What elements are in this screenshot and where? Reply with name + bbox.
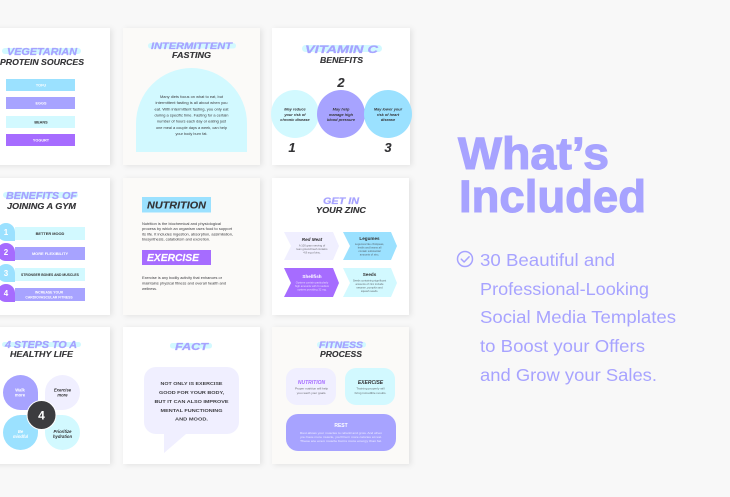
arch shape with text: intermittent fasting is all about when you bbox=[156, 101, 228, 105]
text block: description: Social Media Templates bbox=[480, 307, 676, 327]
circle: blood pressure: May help bbox=[333, 106, 350, 112]
arch shape with text: one meal a couple days a week, can help bbox=[156, 126, 227, 130]
heading: benefits of joining a gym bbox=[3, 191, 78, 211]
list: protein bars: BEANS bbox=[34, 120, 48, 124]
text block: description bbox=[480, 250, 676, 385]
chevron: seeds: Seeds bbox=[363, 272, 377, 277]
petal: walk more: more bbox=[15, 392, 26, 398]
heading: get in your zinc bbox=[316, 196, 366, 215]
text block: description: Professional-Looking bbox=[480, 279, 649, 299]
box: nutrition: Proper nutrition will help bbox=[295, 386, 328, 390]
panel: vitamin c benefits bbox=[271, 28, 412, 165]
numbers 1 2 3: 3 bbox=[384, 140, 392, 155]
heading: vitamin c benefits: BENEFITS bbox=[320, 56, 364, 65]
title: What's Included: What’s bbox=[458, 128, 609, 179]
row 1: better mood bbox=[0, 223, 85, 241]
text block: description: to Boost your Offers bbox=[480, 336, 645, 356]
box: rest bbox=[286, 414, 396, 451]
numbers 1 2 3: 2 bbox=[336, 75, 345, 90]
heading: vegetarian protein sources: VEGETARIAN bbox=[7, 47, 78, 58]
circle: heart disease: disease bbox=[381, 117, 396, 122]
heading: nutrition: NUTRITION bbox=[147, 201, 207, 212]
heading: benefits of joining a gym: JOINING A GYM bbox=[7, 202, 76, 211]
circle: reduce chronic disease: May reduce bbox=[284, 106, 307, 112]
chevron: shellfish: oysters providing 32 mg. bbox=[297, 288, 327, 292]
heading: get in your zinc: YOUR ZINC bbox=[316, 206, 366, 215]
panel: fitness process bbox=[272, 327, 409, 464]
petal: be mindful: Be bbox=[18, 429, 24, 434]
chevron: legumes: lentils and beans all bbox=[358, 246, 382, 250]
petal: walk more: Walk bbox=[15, 388, 25, 392]
speech bubble with fact text: GOOD FOR YOUR BODY, bbox=[159, 390, 225, 396]
row 3: stronger bones bbox=[0, 264, 85, 282]
box: exercise: bring incredible results. bbox=[355, 391, 387, 395]
row 4: cardiovascular fitness: CARDIOVASCULAR FITNESS bbox=[25, 296, 73, 300]
text: exercise definition bbox=[142, 276, 226, 291]
arch shape with text: your body burn fat. bbox=[176, 132, 208, 136]
chevron: seeds: squash seeds. bbox=[361, 289, 378, 293]
heading: vitamin c benefits: VITAMIN C bbox=[305, 44, 379, 56]
heading: intermittent fasting: FASTING bbox=[172, 51, 211, 60]
center circle: 4: 4 bbox=[38, 408, 45, 422]
text: nutrition definition: biosynthesis, catabolism and excretion. bbox=[142, 238, 210, 242]
title: What's Included bbox=[458, 128, 646, 222]
list: protein bars: EGGS bbox=[36, 102, 47, 106]
heading: fitness process bbox=[317, 340, 366, 359]
heading: get in your zinc: GET IN bbox=[323, 196, 360, 207]
row 1: better mood: 1 bbox=[4, 228, 9, 237]
chevron: legumes: Legumes bbox=[359, 236, 380, 241]
speech bubble with fact text: AND MOOD. bbox=[175, 417, 208, 423]
arch shape with text: number of hours each day or eating just bbox=[157, 120, 226, 124]
chevron: legumes bbox=[343, 232, 397, 260]
row 4: cardiovascular fitness bbox=[0, 284, 85, 302]
petal: walk more bbox=[3, 375, 38, 410]
list: protein bars bbox=[6, 79, 75, 146]
heading: exercise: EXERCISE bbox=[147, 253, 199, 264]
circle: reduce chronic disease bbox=[271, 90, 319, 138]
petal: prioritize hydration bbox=[45, 415, 80, 450]
box: rest: you have more muscle, you'll burn more calories at rest. bbox=[300, 435, 382, 439]
heading: intermittent fasting: INTERMITTENT bbox=[151, 41, 233, 52]
heading: intermittent fasting bbox=[148, 41, 236, 60]
speech bubble with fact text: NOT ONLY IS EXERCISE bbox=[160, 381, 223, 387]
petal: prioritize hydration: hydration bbox=[53, 434, 72, 439]
chevron: shellfish: Oysters contain particularly bbox=[296, 280, 329, 284]
panel: vegetarian protein sources bbox=[0, 28, 110, 165]
box: rest: REST bbox=[334, 423, 348, 429]
chevron: red meat: Red Meat bbox=[302, 237, 323, 242]
chevron: red meat: A 100 gram serving of bbox=[299, 244, 325, 248]
panel: fact bbox=[123, 327, 260, 464]
chevron: red meat bbox=[284, 232, 339, 260]
circle: blood pressure: manage high bbox=[329, 112, 354, 117]
numbers 1 2 3: 1 bbox=[288, 140, 296, 155]
text: nutrition definition: process by which an organism uses food to support bbox=[142, 227, 232, 231]
box: nutrition bbox=[286, 368, 336, 405]
petal: be mindful bbox=[3, 415, 38, 450]
chevron: legumes: contain substantial bbox=[358, 249, 381, 253]
box: nutrition: NUTRITION bbox=[298, 380, 325, 386]
arch shape with text bbox=[136, 68, 247, 152]
icon: check circle bbox=[458, 252, 472, 266]
text block: description: 30 Beautiful and bbox=[480, 250, 615, 270]
speech bubble with fact text bbox=[144, 367, 239, 453]
row 4: cardiovascular fitness: 4 bbox=[4, 289, 9, 298]
chevron: seeds: Seeds containing significant bbox=[353, 278, 386, 282]
row 4: cardiovascular fitness: INCREASE YOUR bbox=[35, 290, 64, 294]
circle: reduce chronic disease: your risk of bbox=[283, 112, 306, 117]
box: rest: Rest allows your muscles to rebuild and grow. And when bbox=[300, 431, 382, 435]
panel: get in your zinc bbox=[272, 178, 409, 315]
chevron: legumes: amounts of zinc. bbox=[360, 252, 380, 256]
text: exercise definition: maintains physical fitness and overall health and bbox=[142, 282, 226, 286]
circle: heart disease bbox=[364, 90, 412, 138]
circle: reduce chronic disease: chronic disease bbox=[280, 117, 311, 122]
speech bubble with fact text: MENTAL FUNCTIONING bbox=[160, 408, 223, 414]
arch shape with text: during a specific time. Fasting for a certain bbox=[154, 114, 228, 118]
chevron: shellfish bbox=[284, 268, 339, 297]
title: What's Included: Included bbox=[459, 171, 646, 222]
text block: description: and Grow your Sales. bbox=[480, 365, 657, 385]
panel: benefits of joining a gym bbox=[0, 178, 110, 315]
petal: prioritize hydration: Prioritize bbox=[54, 429, 72, 434]
chevron: legumes: Legumes like chickpeas, bbox=[355, 242, 384, 246]
row 2: more flexibility: MORE FLEXIBILITY bbox=[32, 251, 68, 256]
heading: fitness process: PROCESS bbox=[320, 350, 363, 359]
box: exercise bbox=[345, 368, 395, 405]
text: nutrition definition bbox=[142, 222, 233, 242]
chevron: shellfish: Shellfish bbox=[302, 274, 322, 279]
circle: blood pressure bbox=[317, 90, 365, 138]
circle: blood pressure: blood pressure bbox=[327, 117, 356, 122]
heading: vegetarian protein sources: PROTEIN SOURCES bbox=[0, 58, 85, 67]
row 1: better mood: BETTER MOOD bbox=[36, 231, 65, 236]
petal: be mindful: mindful bbox=[13, 434, 29, 439]
arch shape with text: eat. With intermittent fasting, you only eat bbox=[154, 107, 228, 111]
circle: heart disease: May lower your bbox=[374, 106, 403, 112]
heading: 4 steps to a healthy life: HEALTHY LIFE bbox=[10, 350, 74, 359]
panel: 4 steps to a healthy life bbox=[0, 327, 110, 464]
petal: exercise more: more bbox=[57, 392, 68, 398]
heading: 4 steps to a healthy life bbox=[2, 340, 81, 359]
heading: fitness process: FITNESS bbox=[319, 340, 364, 351]
text: nutrition definition: Nutrition is the biochemical and physiological bbox=[142, 222, 221, 226]
box: rest: These are even muscle burns more energy than fat. bbox=[300, 439, 382, 443]
chevron: shellfish: high amounts with 6 medium bbox=[295, 284, 330, 288]
row 3: stronger bones: STRONGER BONES AND MUSCLES bbox=[21, 273, 80, 277]
speech bubble with fact text: BUT IT CAN ALSO IMPROVE bbox=[154, 399, 229, 405]
arch shape with text: Many diets focus on what to eat, but bbox=[160, 95, 223, 99]
petal: exercise more bbox=[45, 375, 80, 410]
box: exercise: Training properly will bbox=[356, 386, 385, 390]
petal: exercise more: Exercise bbox=[54, 388, 72, 392]
panel: intermittent fasting bbox=[123, 28, 260, 165]
chevron: seeds bbox=[343, 268, 397, 297]
text: exercise definition: wellness. bbox=[142, 287, 157, 291]
heading: vitamin c benefits bbox=[302, 44, 382, 65]
text: nutrition definition: its life. It includes ingestion, absorption, assimilation, bbox=[142, 232, 233, 236]
chevron: red meat: lean ground beef contains bbox=[297, 247, 328, 251]
heading: vegetarian protein sources bbox=[0, 47, 85, 67]
box: nutrition: you reach your goals. bbox=[297, 391, 326, 395]
numbers 1 2 3 bbox=[288, 75, 392, 155]
row 3: stronger bones: 3 bbox=[4, 269, 9, 278]
text: exercise definition: Exercise is any bodily activity that enhances or bbox=[142, 276, 223, 280]
circle: heart disease: risk of heart bbox=[377, 112, 400, 117]
chevron: seeds: sesame, pumpkin and bbox=[356, 286, 383, 290]
chevron: seeds: amounts of zinc include bbox=[355, 282, 384, 286]
panel: nutrition and exercise bbox=[123, 178, 260, 315]
list: protein bars: YOGURT bbox=[33, 138, 50, 142]
row 2: more flexibility bbox=[0, 243, 85, 261]
heading: benefits of joining a gym: BENEFITS OF bbox=[6, 191, 78, 202]
chevron: red meat: 4.8 mg of zinc. bbox=[303, 250, 321, 254]
heading: 4 steps to a healthy life: 4 STEPS TO A bbox=[4, 340, 77, 351]
row 2: more flexibility: 2 bbox=[4, 248, 9, 257]
list: protein bars: TOFU bbox=[36, 84, 46, 88]
box: exercise: EXERCISE bbox=[358, 380, 384, 386]
heading: fact: FACT bbox=[175, 341, 210, 353]
